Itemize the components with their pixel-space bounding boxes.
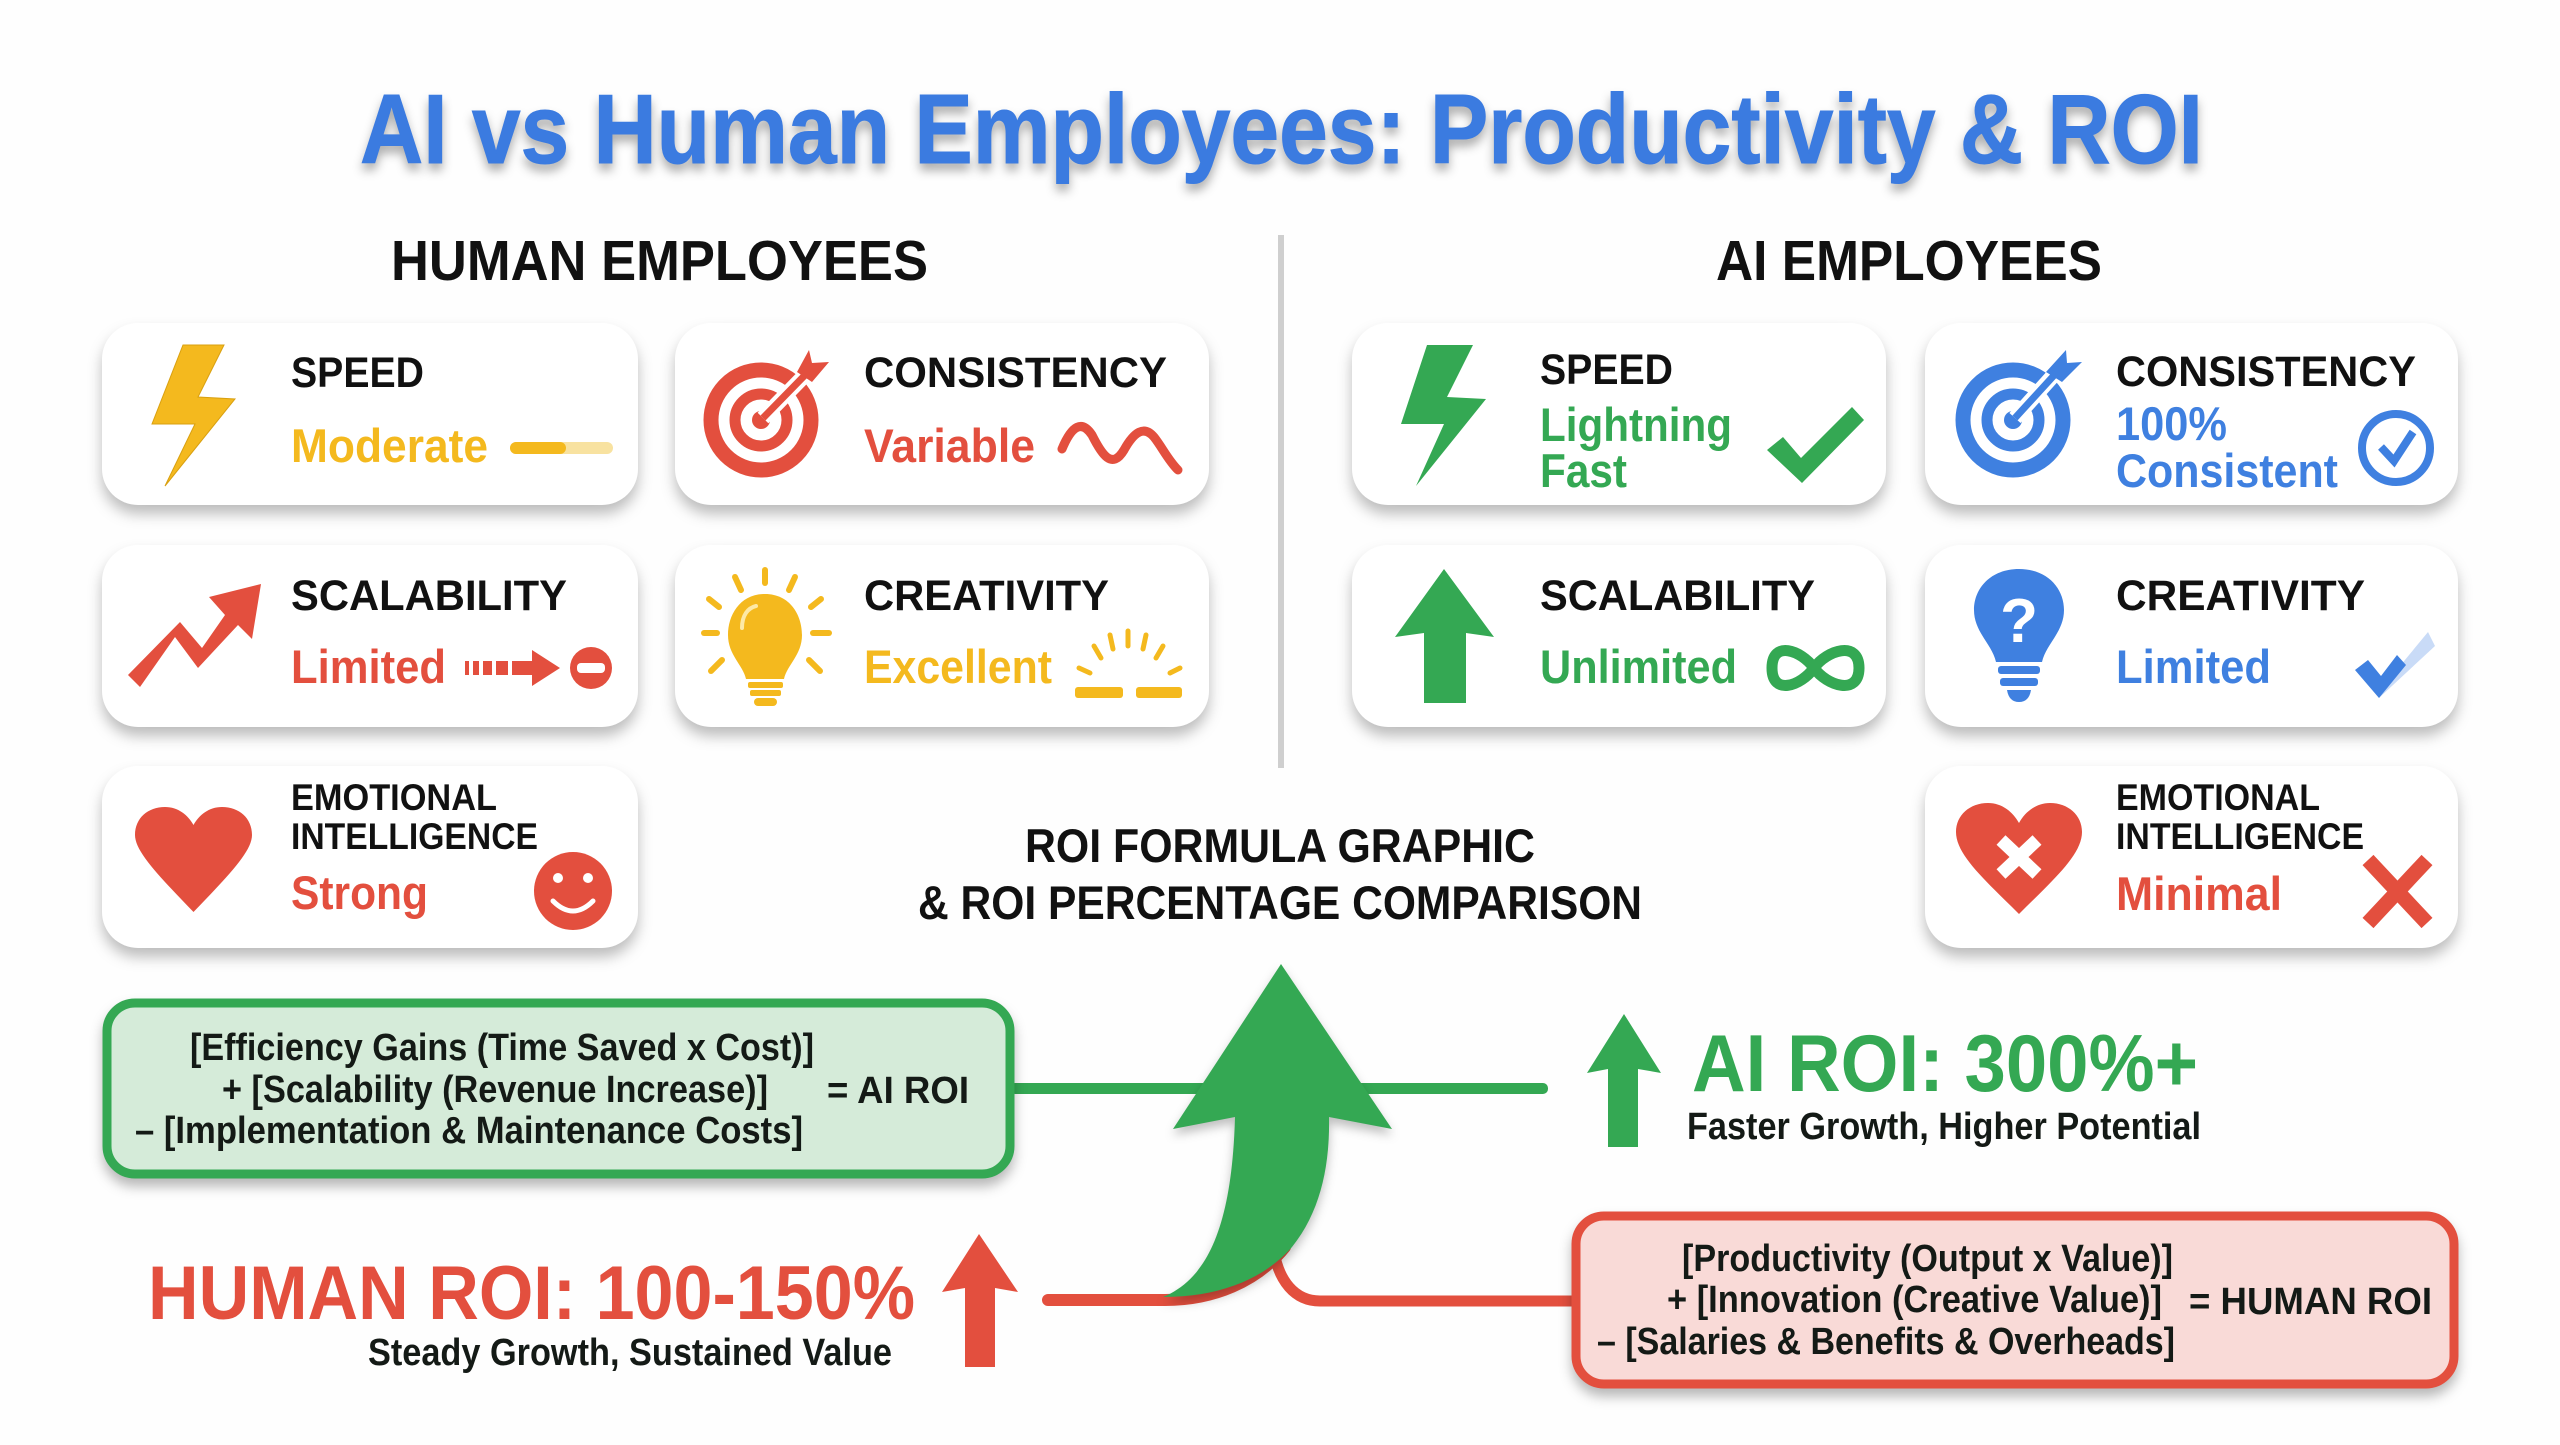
icon: red heart xyxy=(135,807,252,912)
formula lines: [Productivity (Output x Value)] xyxy=(1682,1238,2173,1280)
panel: human creativity xyxy=(675,545,1209,727)
value: lightning fast xyxy=(1540,398,1732,497)
heading: AI employees: AI EMPLOYEES xyxy=(1716,229,2102,293)
formula lines: – [Salaries & Benefits & Overheads] xyxy=(1597,1321,2175,1363)
panel: AI consistency xyxy=(1925,323,2458,505)
panel: AI emotional intelligence xyxy=(1925,766,2458,948)
label: emotional intelligence xyxy=(2116,777,2364,857)
panel: human ROI formula xyxy=(1576,1216,2454,1384)
icon: blue question bulb xyxy=(1974,569,2064,702)
label: emotional intelligence xyxy=(291,777,538,857)
value: human ROI 100-150%: HUMAN ROI: 100-150% xyxy=(148,1251,915,1336)
value: 100% consistent: 100% xyxy=(2116,397,2227,450)
panel: AI creativity xyxy=(1925,545,2458,727)
icon: yellow light bulb xyxy=(704,570,829,706)
formula lines xyxy=(135,1027,814,1152)
value: strong: Strong xyxy=(291,866,428,919)
panel: human consistency xyxy=(675,323,1209,505)
value: unlimited: Unlimited xyxy=(1540,640,1737,693)
icon: heart with cross xyxy=(1956,803,2082,914)
label: emotional intelligence: EMOTIONAL xyxy=(291,777,497,818)
icon: green up arrow xyxy=(1587,1014,1661,1147)
connector: green line xyxy=(1010,1083,1548,1094)
icon: red target xyxy=(711,350,829,470)
title: AI vs Human Employees: Productivity & ROI xyxy=(360,74,2203,184)
formula result: = AI ROI xyxy=(827,1070,969,1112)
heading: ROI formula graphic: ROI FORMULA GRAPHIC xyxy=(1025,819,1535,872)
value: excellent: Excellent xyxy=(864,640,1052,693)
icon: smiley face xyxy=(534,852,612,930)
stat: human ROI xyxy=(148,1234,1018,1374)
value: minimal: Minimal xyxy=(2116,867,2282,920)
formula lines xyxy=(1597,1238,2175,1363)
label: consistency: CONSISTENCY xyxy=(864,349,1167,397)
value: variable: Variable xyxy=(864,419,1035,472)
formula lines: [Efficiency Gains (Time Saved x Cost)] xyxy=(190,1027,814,1069)
value: 100% consistent xyxy=(2116,397,2338,497)
icon: green check xyxy=(1767,407,1864,483)
label: creativity: CREATIVITY xyxy=(864,572,1109,620)
formula lines: + [Scalability (Revenue Increase)] xyxy=(222,1069,768,1111)
icon: dashed arrow to stop xyxy=(465,647,612,689)
icon: circled check xyxy=(2362,414,2430,482)
formula lines: – [Implementation & Maintenance Costs] xyxy=(135,1110,803,1152)
panel: human speed xyxy=(102,323,638,505)
value: lightning fast: Lightning xyxy=(1540,398,1732,451)
panel: AI ROI formula xyxy=(107,1003,1010,1174)
label: emotional intelligence: EMOTIONAL xyxy=(2116,777,2320,818)
heading: human employees: HUMAN EMPLOYEES xyxy=(391,229,928,293)
panel: human scalability xyxy=(102,545,638,727)
label: emotional intelligence: INTELLIGENCE xyxy=(2116,816,2364,857)
label: scalability: SCALABILITY xyxy=(291,572,567,620)
stat: AI ROI xyxy=(1587,1014,2201,1148)
label: scalability: SCALABILITY xyxy=(1540,572,1815,620)
icon: sunrise rating xyxy=(1075,631,1182,698)
icon: faded check xyxy=(2355,632,2435,698)
icon: yellow lightning bolt xyxy=(152,345,235,486)
connector: red line right xyxy=(1274,1252,1578,1301)
value: lightning fast: Fast xyxy=(1540,444,1627,497)
heading: ROI formula graphic xyxy=(918,819,1642,929)
icon: wave xyxy=(1062,427,1178,470)
panel: AI scalability xyxy=(1352,545,1886,727)
caption: steady growth: Steady Growth, Sustained Value xyxy=(368,1332,892,1374)
label: emotional intelligence: INTELLIGENCE xyxy=(291,816,538,857)
icon: blue question bulb: ? xyxy=(2000,587,2038,656)
icon: red up arrow xyxy=(942,1234,1018,1367)
icon: progress bar xyxy=(510,442,613,454)
icon: red rising arrow xyxy=(128,584,261,687)
icon: blue target xyxy=(1963,350,2082,470)
icon: green lightning bolt xyxy=(1401,345,1486,486)
icon: red cross xyxy=(2368,860,2427,923)
formula result: = HUMAN ROI xyxy=(2189,1281,2432,1323)
arrow: large green growth arrow xyxy=(1163,964,1392,1297)
label: creativity: CREATIVITY xyxy=(2116,572,2365,620)
connector: red line left xyxy=(1048,1247,1285,1300)
panel: human emotional intelligence xyxy=(102,766,638,948)
caption: faster growth: Faster Growth, Higher Potential xyxy=(1687,1106,2201,1148)
icon: green up arrow xyxy=(1395,569,1494,703)
panel: AI speed xyxy=(1352,323,1886,505)
label: consistency: CONSISTENCY xyxy=(2116,348,2416,396)
formula lines: + [Innovation (Creative Value)] xyxy=(1667,1279,2162,1321)
value: AI ROI 300%+: AI ROI: 300%+ xyxy=(1692,1019,2198,1109)
label: speed: SPEED xyxy=(291,349,424,397)
value: limited: Limited xyxy=(291,640,446,693)
label: speed: SPEED xyxy=(1540,346,1673,394)
value: moderate: Moderate xyxy=(291,419,488,472)
value: limited: Limited xyxy=(2116,640,2271,693)
heading: ROI formula graphic: & ROI PERCENTAGE COMPARISON xyxy=(918,876,1642,929)
value: 100% consistent: Consistent xyxy=(2116,444,2338,497)
icon: infinity xyxy=(1772,651,1859,685)
